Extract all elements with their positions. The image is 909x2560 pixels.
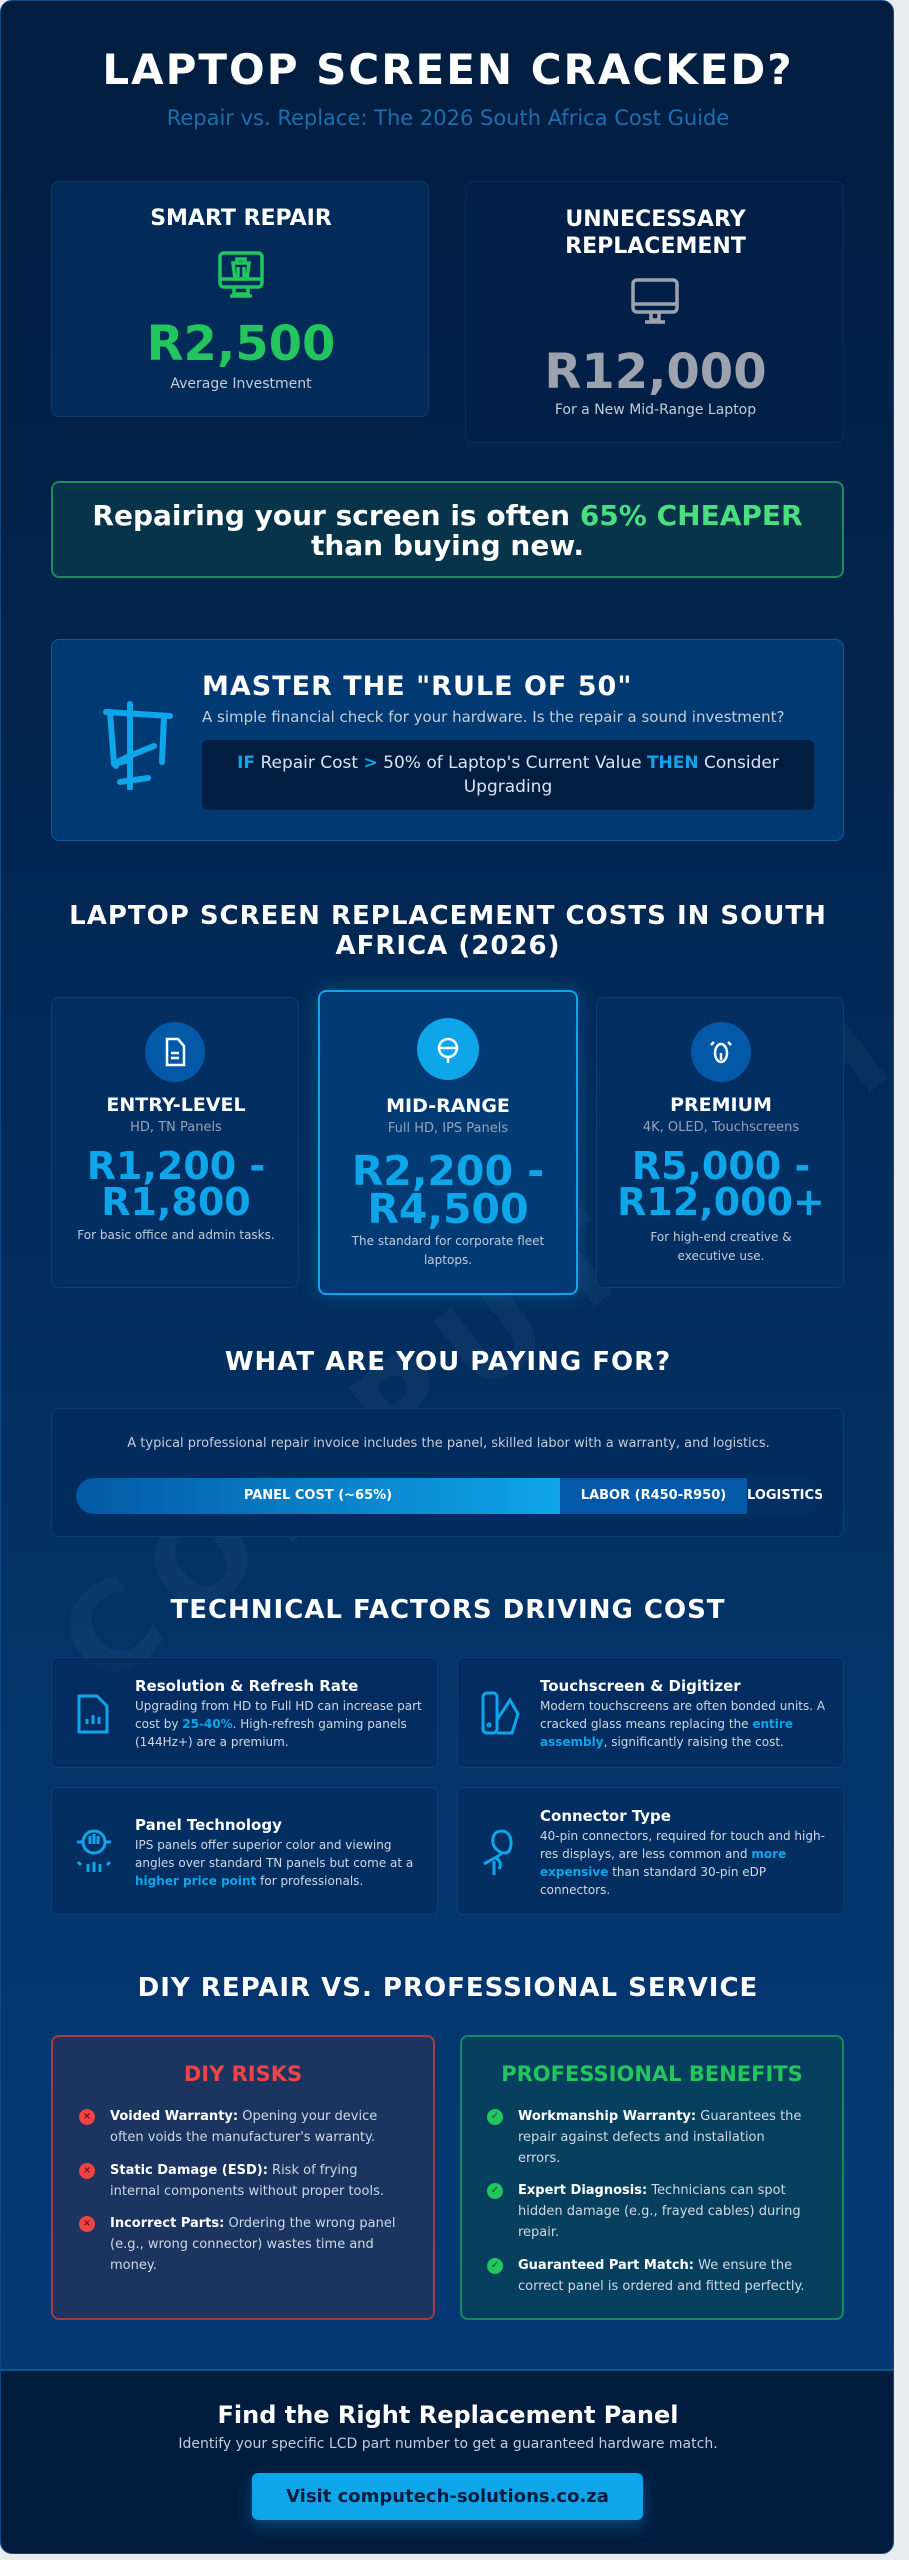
list: Expert Diagnosis: Technicians can spot hidden damage (e.g., frayed cables) during repair. <box>518 2183 801 2240</box>
list: Static Damage (ESD): Risk of frying internal components without proper tools. <box>110 2163 384 2199</box>
panel: mid-range: laptops. <box>424 1253 472 1267</box>
panel: entry-level <box>51 997 299 1288</box>
price: R12,000: R12,000 <box>544 344 767 400</box>
list: Incorrect Parts: Ordering the wrong panel (e.g., wrong connector) wastes time and money. <box>110 2216 395 2273</box>
factor: resolution: Upgrading from HD to Full HD can increase part cost by 25-40%. High-refresh gaming panels (144Hz+) are a premium. <box>135 1699 422 1749</box>
factor: touchscreen <box>457 1657 844 1768</box>
bar chart: PANEL COST (~65%) <box>244 1488 392 1503</box>
heading: costs: AFRICA (2026) <box>336 931 560 961</box>
price <box>87 1144 265 1224</box>
panel: diy risks <box>51 2035 435 2320</box>
factor: connector <box>457 1787 844 1915</box>
list <box>79 2109 395 2273</box>
list <box>487 2109 804 2294</box>
footer <box>1 2369 895 2559</box>
panel: premium: 4K, OLED, Touchscreens <box>643 1120 799 1135</box>
heading: DIY RISKS <box>184 2062 302 2086</box>
factor: panel tech: Panel Technology <box>135 1816 282 1834</box>
price: R12,000+ <box>617 1180 825 1224</box>
panel: mid-range: The standard for corporate fleet <box>352 1234 544 1248</box>
panel: entry-level: HD, TN Panels <box>130 1120 222 1135</box>
name: ENTRY-LEVEL <box>106 1094 246 1116</box>
heading: UNNECESSARY <box>565 207 746 232</box>
heading <box>565 207 746 259</box>
bar chart: LABOR (R450-R950) <box>581 1488 726 1503</box>
heading: paying for: WHAT ARE YOU PAYING FOR? <box>225 1347 671 1377</box>
formula box: Upgrading <box>464 777 552 797</box>
price: R1,800 <box>101 1180 251 1224</box>
text: A typical professional repair invoice includes the panel, skilled labor with a warranty, and logistics. <box>127 1436 770 1451</box>
factor: resolution: Resolution & Refresh Rate <box>135 1677 358 1695</box>
heading: costs <box>69 901 827 961</box>
panel: premium: For high-end creative & <box>650 1230 792 1244</box>
callout: 65% cheaper <box>51 481 844 578</box>
caption: For a New Mid-Range Laptop <box>555 402 756 418</box>
price <box>352 1147 544 1233</box>
price <box>617 1144 825 1224</box>
bar chart <box>76 1478 822 1514</box>
panel: mid-range <box>318 990 578 1295</box>
price: R1,200 - <box>87 1144 265 1188</box>
icon: scales <box>103 701 173 790</box>
name: MID-RANGE <box>386 1095 510 1117</box>
subtitle: Repair vs. Replace: The 2026 South Africa Cost Guide <box>167 106 729 130</box>
panel: rule of 50 <box>51 639 844 841</box>
panel: professional benefits <box>460 2035 844 2320</box>
factor: touchscreen: Modern touchscreens are often bonded units. A cracked glass means replacing the entire assembly, significantly raising the cost. <box>540 1699 825 1749</box>
bar chart: LOGISTICS <box>747 1488 822 1503</box>
icon: document <box>145 1022 205 1082</box>
price: R5,000 - <box>632 1144 810 1188</box>
button <box>252 2473 643 2520</box>
heading: REPLACEMENT <box>565 234 746 259</box>
price: R4,500 <box>367 1185 529 1233</box>
list: × <box>83 2218 91 2229</box>
caption: Average Investment <box>170 376 312 392</box>
heading: smart repair: SMART REPAIR <box>150 206 332 231</box>
callout: 65% cheaper: Repairing your screen is often 65% CHEAPER <box>92 499 803 532</box>
factor: connector: Connector Type <box>540 1807 671 1825</box>
footer text: Identify your specific LCD part number to get a guaranteed hardware match. <box>178 2436 718 2452</box>
heading: PROFESSIONAL BENEFITS <box>501 2062 803 2086</box>
list: Voided Warranty: Opening your device often voids the manufacturer's warranty. <box>110 2109 377 2145</box>
heading: rule of 50: MASTER THE "RULE OF 50" <box>202 671 632 702</box>
list: × <box>83 2111 91 2122</box>
panel: unnecessary replacement <box>465 181 844 443</box>
icon <box>77 1830 111 1872</box>
panel: entry-level: For basic office and admin tasks. <box>77 1228 275 1242</box>
icon <box>482 1692 520 1734</box>
factor: panel tech <box>51 1787 438 1915</box>
panel: premium <box>596 997 844 1288</box>
factor: resolution <box>51 1657 438 1768</box>
icon <box>483 1830 512 1875</box>
panel: smart repair <box>51 181 429 417</box>
list: Guaranteed Part Match: We ensure the correct panel is ordered and fitted perfectly. <box>518 2258 804 2294</box>
factor: connector: 40-pin connectors, required for touch and high-res displays, are less common and more expensive than standard 30-pin eDP connectors. <box>540 1829 825 1897</box>
heading: diy vs pro: DIY REPAIR VS. PROFESSIONAL SERVICE <box>138 1973 758 2003</box>
panel: premium: executive use. <box>678 1249 764 1263</box>
panel: invoice breakdown <box>51 1408 844 1537</box>
formula box: IF Repair Cost > 50% of Laptop's Current Value THEN Consider <box>237 753 779 773</box>
heading: costs: LAPTOP SCREEN REPLACEMENT COSTS IN SOUTH <box>69 901 827 931</box>
icon: repair monitor <box>218 251 264 298</box>
text: A simple financial check for your hardware. Is the repair a sound investment? <box>202 708 784 726</box>
factor: touchscreen: Touchscreen & Digitizer <box>540 1677 741 1695</box>
list: ✓ <box>491 2185 499 2196</box>
heading: technical factors: TECHNICAL FACTORS DRIVING COST <box>170 1595 726 1625</box>
price: R2,500: R2,500 <box>147 316 335 372</box>
icon <box>417 1018 479 1080</box>
list: Workmanship Warranty: Guarantees the repair against defects and installation errors. <box>518 2109 801 2166</box>
panel: mid-range: Full HD, IPS Panels <box>388 1121 508 1136</box>
callout: 65% cheaper: than buying new. <box>311 529 584 562</box>
button: Visit computech-solutions.co.za <box>286 2486 609 2507</box>
name: PREMIUM <box>670 1094 772 1116</box>
list: ✓ <box>491 2111 499 2122</box>
list: ✓ <box>491 2260 499 2271</box>
title: LAPTOP SCREEN CRACKED? <box>102 45 794 94</box>
price: R2,200 - <box>352 1147 544 1195</box>
factor: panel tech: IPS panels offer superior color and viewing angles over standard TN panels but come at a higher price point for professionals. <box>135 1838 413 1888</box>
icon: monitor <box>631 278 679 324</box>
formula box <box>202 740 814 810</box>
icon <box>691 1022 751 1082</box>
list: × <box>83 2165 91 2176</box>
footer heading: Find the Right Replacement Panel <box>217 2401 679 2429</box>
icon <box>78 1694 108 1734</box>
